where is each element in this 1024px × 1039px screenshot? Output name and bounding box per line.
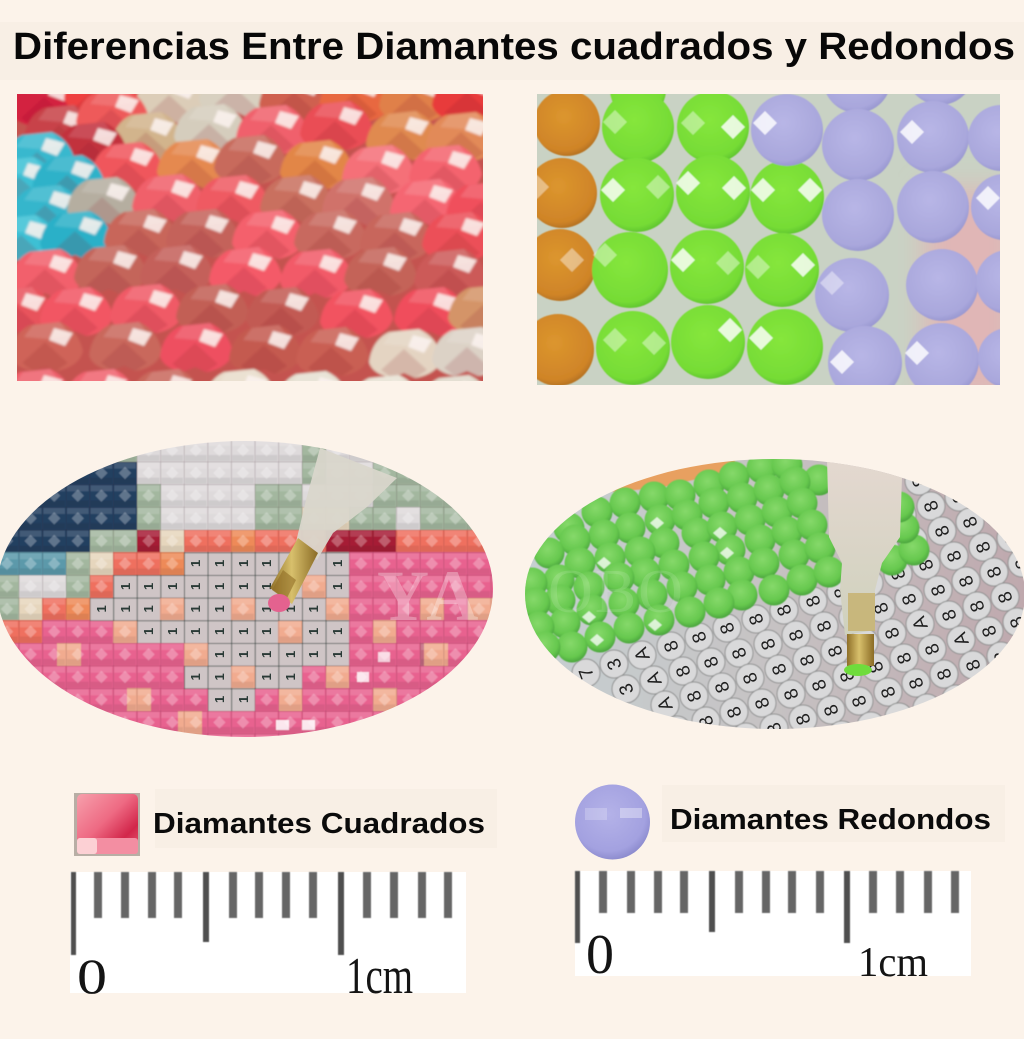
printed canvas symbols: numbers and letters: 888888 [831,681,997,743]
printed canvas symbols: circles [571,478,1024,729]
ruler: round diamond scale [575,871,971,986]
watermark: OBO [548,558,685,626]
legend: square diamond icon [74,793,140,856]
oval photo: square diamonds on canvas with applicator pen [0,439,500,739]
legend: round diamond label: Diamantes Redondos [670,804,991,836]
ruler: square diamond scale: 0 [77,948,107,1004]
legend: round diamond icon [575,784,650,860]
number symbols on canvas: 11111111 [94,605,321,612]
legend: round diamond label [662,785,1005,842]
number symbols on canvas: 111111 [212,651,345,658]
number symbols on canvas: 11111111 [141,628,345,635]
photo: square diamonds close-up [17,94,483,381]
ruler: square diamond scale: 1cm [346,948,413,1005]
number symbols on canvas: 1111 [188,673,298,680]
watermark: YA [377,556,482,636]
applicator pen [827,458,902,676]
printed canvas symbols: numbers and letters: 3A8888888888888 [615,554,1024,697]
applicator pen [268,448,397,612]
number symbols on canvas: 1111 [188,560,274,567]
oval photo: round diamonds on canvas with applicator pen [525,459,1024,729]
ruler: round diamond scale: 1cm [858,940,928,986]
printed canvas symbols: numbers and letters: 88 [908,463,960,489]
title: Diferencias Entre Diamantes cuadrados y Redondos [13,26,1015,68]
number symbols on canvas: 1 [330,560,345,567]
printed canvas symbols: numbers and letters [578,481,1022,729]
number symbols on canvas: 1 [330,583,345,590]
orange diamonds strip [612,460,736,492]
ruler: square diamond scale [70,872,466,1005]
legend: square diamond label: Diamantes Cuadrados [153,808,485,840]
printed canvas symbols: numbers and letters: A88888888A888 [654,588,1018,713]
legend: square diamond label [153,789,497,848]
number symbols on canvas [94,560,345,703]
printed canvas symbols: numbers and letters: 8888888888 [735,647,1014,745]
number symbols on canvas: 11 [212,696,251,703]
printed canvas symbols: numbers and letters: 88888 [863,479,1000,532]
green round diamonds [516,450,930,662]
printed canvas symbols: numbers and letters: 73A8888888888888 [575,529,1024,681]
photo: round diamonds close-up [537,94,1000,385]
title [0,22,1024,80]
ruler: round diamond scale: 0 [586,924,614,986]
number symbols on canvas: 1111111 [118,583,274,590]
printed canvas symbols: numbers and letters: 8888888888A88 [666,613,1024,738]
